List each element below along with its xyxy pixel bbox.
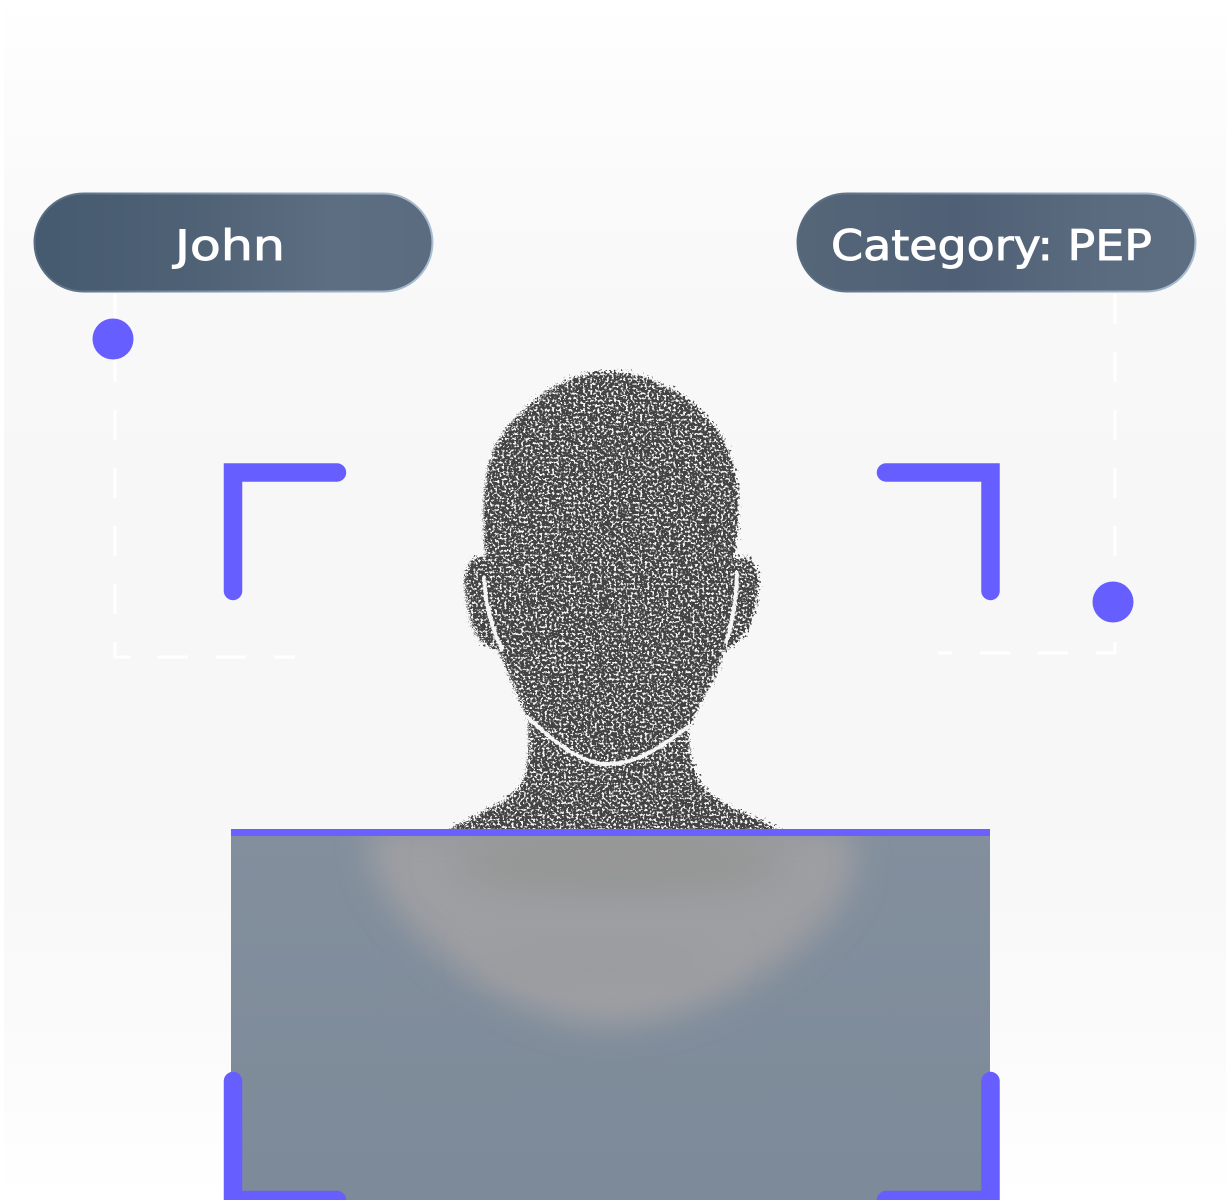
scan bracket: bottom right: [886, 1081, 990, 1200]
scan bracket: top right: [886, 472, 990, 591]
blurred head reflection: [370, 826, 855, 1026]
category label pill: [798, 194, 1196, 292]
marker dot right: [1092, 582, 1134, 622]
name label pill: [34, 194, 432, 292]
dashed connector: John label: [115, 294, 295, 657]
grey panel with blurred reflection: [231, 826, 990, 1200]
panel top edge: [231, 829, 990, 836]
label text: John: John: [171, 221, 285, 270]
dashed connector: category label: [938, 294, 1115, 653]
label text: Category: PEP: Category: PEP: [831, 221, 1152, 270]
scan bracket: bottom left: [233, 1081, 337, 1200]
stippled head silhouette: [445, 372, 782, 832]
scan bracket: top left: [233, 472, 337, 591]
marker dot left: [92, 318, 134, 360]
jaw and ear highlight lines: [484, 572, 737, 764]
